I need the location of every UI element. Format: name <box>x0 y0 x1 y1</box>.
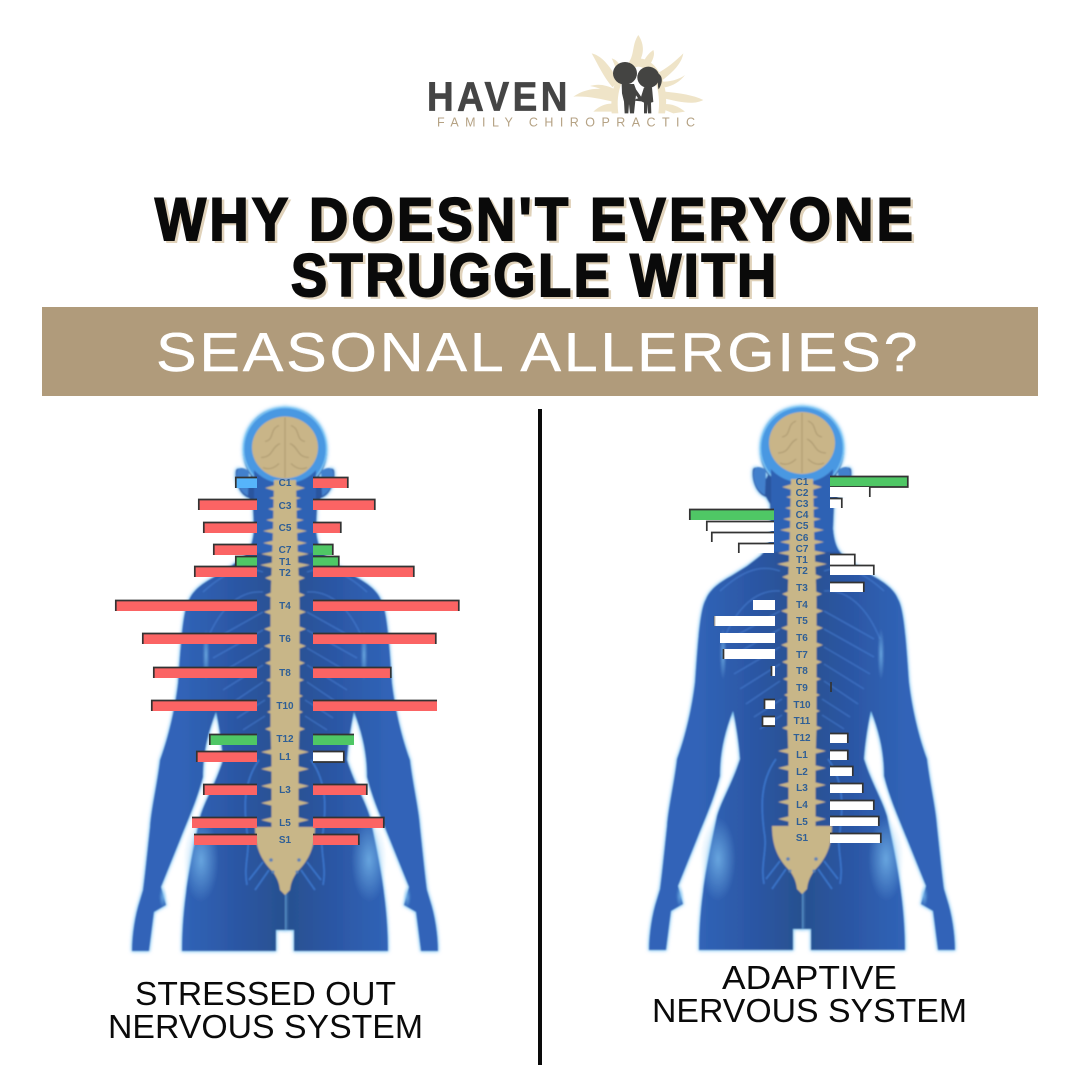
vertebra labels: left: L5 <box>279 818 291 829</box>
vertebra labels: right: L1 <box>796 750 808 761</box>
vertebra labels: left: T12 <box>276 734 294 745</box>
title line 1: WHY DOESN'T EVERYONE <box>155 186 913 254</box>
vertebra labels: left: T6 <box>279 634 291 645</box>
vertebra labels: right: S1 <box>796 833 809 844</box>
bar chart: right side bars <box>313 477 459 845</box>
vertebra labels: right: C6 <box>796 533 809 544</box>
logo wordmark: HAVEN <box>427 75 567 120</box>
caption: stressed out nervous system: STRESSED OUT <box>135 975 396 1012</box>
vertebra labels: left: T8 <box>279 668 291 679</box>
vertebra labels: right <box>793 477 811 844</box>
vertebra labels: left: C7 <box>279 545 292 556</box>
caption: stressed out nervous system: NERVOUS SYSTEM <box>108 1008 423 1045</box>
vertebra labels: left: L3 <box>279 785 291 796</box>
divider line <box>538 409 542 1065</box>
banner: seasonal allergies: SEASONAL ALLERGIES? <box>156 323 918 383</box>
vertebra labels: left: C1 <box>279 478 292 489</box>
vertebra labels: left: C3 <box>279 501 292 512</box>
bar chart: left side bars <box>689 509 775 726</box>
vertebra labels: left: T2 <box>279 568 291 579</box>
vertebra labels: left <box>276 478 294 846</box>
vertebra labels: right: C7 <box>796 544 809 555</box>
vertebra labels: right: C1 <box>796 477 809 488</box>
title line 2: STRUGGLE WITH <box>291 242 776 310</box>
title <box>155 186 915 312</box>
vertebra labels: right: T9 <box>796 683 808 694</box>
vertebra labels: left: C5 <box>279 523 292 534</box>
caption: stressed out nervous system <box>108 975 423 1045</box>
panel: stressed out nervous system <box>108 407 459 1045</box>
vertebra labels: left: L1 <box>279 752 291 763</box>
vertebra labels: left: T4 <box>279 601 291 612</box>
vertebra labels: right: L4 <box>796 800 808 811</box>
title line 1: WHY DOESN'T EVERYONE <box>158 188 915 256</box>
bar chart: left side bars <box>115 477 257 845</box>
logo tagline: FAMILY CHIROPRACTIC <box>437 116 695 130</box>
figure: right body with spine <box>649 406 955 950</box>
caption: adaptive nervous system: NERVOUS SYSTEM <box>652 992 967 1029</box>
vertebra labels: right: T6 <box>796 633 808 644</box>
vertebra labels: right: T3 <box>796 583 808 594</box>
vertebra labels: right: C5 <box>796 521 809 532</box>
vertebra labels: right: C3 <box>796 499 809 510</box>
title line 2: STRUGGLE WITH <box>294 244 779 312</box>
vertebra labels: left: T10 <box>276 701 294 712</box>
vertebra labels: right: L2 <box>796 767 808 778</box>
vertebra labels: left: T1 <box>279 557 291 568</box>
vertebra labels: right: T12 <box>793 733 811 744</box>
icon: two children silhouettes <box>613 62 662 113</box>
vertebra labels: right: T5 <box>796 616 808 627</box>
vertebra labels: right: L3 <box>796 783 808 794</box>
figure: left body with spine <box>132 407 438 951</box>
vertebra labels: right: T4 <box>796 600 808 611</box>
vertebra labels: right: C2 <box>796 488 809 499</box>
vertebra labels: right: T7 <box>796 650 808 661</box>
icon: sun rays and children <box>573 35 703 113</box>
vertebra labels: right: L5 <box>796 817 808 828</box>
vertebra labels: right: T2 <box>796 566 808 577</box>
logo <box>427 35 703 130</box>
bar chart: right side bars <box>830 476 908 843</box>
panel: adaptive nervous system <box>649 406 967 1029</box>
vertebra labels: right: C4 <box>796 510 809 521</box>
banner: seasonal allergies <box>42 307 1038 396</box>
vertebra labels: right: T10 <box>793 700 811 711</box>
vertebra labels: right: T8 <box>796 666 808 677</box>
icon: sun rays <box>573 35 703 113</box>
vertebra labels: right: T11 <box>794 716 811 727</box>
caption: adaptive nervous system <box>652 959 967 1029</box>
vertebra labels: left: S1 <box>279 835 292 846</box>
caption: adaptive nervous system: ADAPTIVE <box>722 959 897 996</box>
vertebra labels: right: T1 <box>796 555 808 566</box>
